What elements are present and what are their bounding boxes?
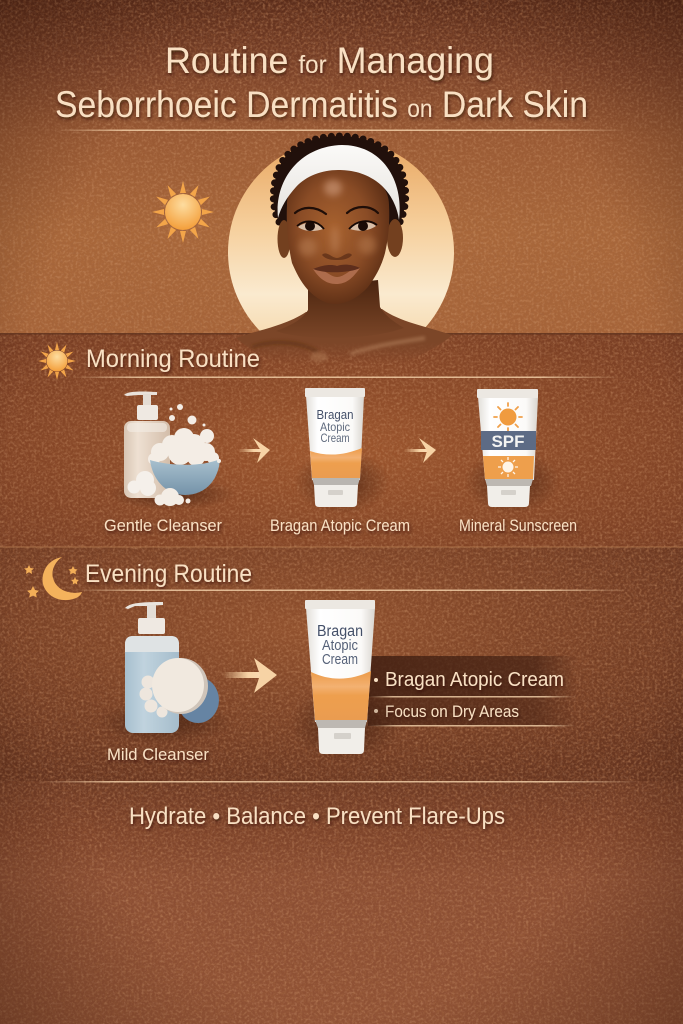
nose <box>322 253 352 260</box>
product: mineral sunscreen tube <box>464 389 560 514</box>
label: mild cleanser: Mild Cleanser <box>107 745 209 764</box>
tube text: Bragan <box>317 623 363 640</box>
product: bragan tube morning <box>294 388 390 514</box>
callout panel <box>368 656 577 726</box>
portrait <box>236 136 452 364</box>
tagline: Hydrate • Balance • Prevent Flare-Ups <box>129 803 505 830</box>
pump bottle <box>124 391 170 498</box>
section heading: evening routine: Evening Routine <box>85 560 252 588</box>
headband <box>278 145 400 220</box>
label: gentle cleanser: Gentle Cleanser <box>104 516 222 535</box>
section heading: evening routine <box>24 557 252 600</box>
tube text <box>316 408 354 445</box>
arrow 1 <box>238 438 270 463</box>
section heading: morning routine: Morning Routine <box>86 345 260 373</box>
face <box>287 168 389 304</box>
icon: morning sun <box>38 342 76 380</box>
chest <box>236 309 452 364</box>
face highlights <box>299 180 376 256</box>
background: lower section <box>0 781 683 1024</box>
product: gentle cleanser <box>108 391 236 510</box>
title: Seborrhoeic Dermatitis on Dark Skin <box>55 84 588 125</box>
background: evening section <box>0 547 683 781</box>
collarbones <box>252 338 425 362</box>
product: mild cleanser <box>97 602 233 744</box>
pump bottle <box>125 602 179 733</box>
eyes <box>297 221 377 231</box>
arrow 3 <box>222 658 277 693</box>
icon: sun <box>152 181 214 243</box>
icon: sun on tube <box>494 403 522 431</box>
label: mineral sunscreen: Mineral Sunscreen <box>459 516 577 535</box>
list item: Focus on Dry Areas <box>385 703 519 721</box>
eyebrows <box>295 207 378 214</box>
section heading: morning routine <box>38 342 260 380</box>
background: top section <box>0 0 683 334</box>
title: Routine for Managing <box>165 40 494 81</box>
tube text: Cream <box>322 651 358 668</box>
list item: Bragan Atopic Cream <box>385 669 564 691</box>
tube text: Atopic <box>322 637 358 654</box>
lips <box>313 268 360 284</box>
tube text <box>317 623 363 668</box>
spf band: SPF <box>491 432 525 451</box>
ears <box>278 219 403 258</box>
tube text: Bragan <box>316 408 354 422</box>
background: morning section <box>0 334 683 547</box>
halo circle <box>228 139 454 333</box>
icon: moon and stars <box>24 557 82 600</box>
arrow 2 <box>404 438 436 463</box>
tube text: Atopic <box>320 420 350 434</box>
title <box>55 40 588 125</box>
label: bragan atopic cream: Bragan Atopic Cream <box>270 516 410 535</box>
cotton pads <box>140 658 219 723</box>
foam in bottle <box>128 471 156 496</box>
tube text: Cream <box>320 431 350 445</box>
product: bragan tube evening <box>290 600 402 762</box>
foam bowl <box>148 404 221 506</box>
neck <box>276 280 404 338</box>
hair <box>273 136 406 240</box>
